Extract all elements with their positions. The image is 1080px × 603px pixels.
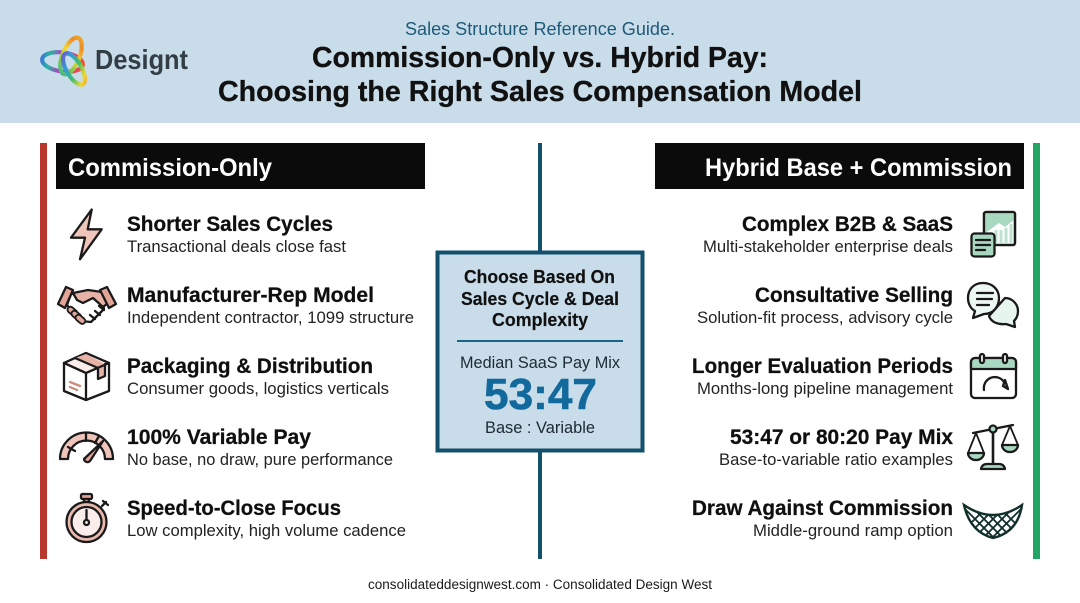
footer: consolidateddesignwest.com · Consolidated Design West [368,577,712,592]
item: pay mix scales: 53:47 or 80:20 Pay Mix [730,426,953,449]
item: manufacturer-rep model: Manufacturer-Rep Model [127,284,374,307]
icon: handshake [58,287,116,325]
pay mix caption: Base : Variable [485,418,595,437]
header kicker: Sales Structure Reference Guide. [405,19,675,39]
item: draw against commission [693,499,1024,540]
item: packaging & distribution: Packaging & Distribution [127,355,373,378]
item: complex b2b & saas [703,212,1015,256]
icon: speedometer gauge [60,432,113,462]
item: 100% variable pay [60,426,393,469]
item: pay mix scales [719,425,1018,469]
icon: balance scales [968,425,1018,469]
item: longer evaluation periods: Longer Evaluation Periods [692,355,953,378]
item: consultative selling: Consultative Selling [755,284,953,307]
item: complex b2b & saas: Complex B2B & SaaS [742,213,953,236]
callout heading: Choose Based On [464,267,615,287]
item: complex b2b & saas: Multi-stakeholder enterprise deals [703,238,953,256]
callout heading: Sales Cycle & Deal [461,289,619,309]
item: shorter sales cycles [71,210,346,259]
logo wordmark: Designt [95,44,188,75]
title: Commission-Only vs. Hybrid Pay: [312,42,768,74]
item: speed-to-close focus [66,494,406,542]
item: shorter sales cycles: Shorter Sales Cycles [127,213,333,236]
panel: commission-only [40,143,425,559]
item: 100% variable pay: No base, no draw, pure performance [127,451,393,469]
heading: commission-only: Commission-Only [68,154,272,182]
item: speed-to-close focus: Low complexity, high volume cadence [127,522,406,540]
icon: parcel box [64,353,109,400]
header band [0,0,1080,123]
title: Choosing the Right Sales Compensation Model [218,76,862,108]
heading: hybrid [655,143,1024,189]
item: manufacturer-rep model: Independent contractor, 1099 structure [127,309,414,327]
logo mark [41,35,89,88]
item: speed-to-close focus: Speed-to-Close Focus [127,497,341,520]
left accent bar [40,143,47,559]
pay mix figure: 53:47 [484,370,597,419]
item: draw against commission: Middle-ground ramp option [753,522,953,540]
item: 100% variable pay: 100% Variable Pay [127,426,311,449]
icon: stopwatch [66,494,108,542]
heading: commission-only [56,143,425,189]
item: manufacturer-rep model [58,284,414,327]
item: longer evaluation periods [692,354,1016,398]
panel: hybrid base + commission [655,143,1061,559]
icon: speech bubbles [968,283,1018,327]
item: consultative selling: Solution-fit process, advisory cycle [697,309,953,327]
item: packaging & distribution [64,353,389,400]
item: pay mix scales: Base-to-variable ratio examples [719,451,953,469]
heading: hybrid: Hybrid Base + Commission [705,154,1012,182]
logo [41,35,188,88]
panel: decision callout [438,252,642,450]
pay mix label: Median SaaS Pay Mix [460,353,620,372]
icon: safety net [962,502,1024,540]
centre divider line [538,143,542,559]
item: packaging & distribution: Consumer goods, logistics verticals [127,380,389,398]
icon: calendar [971,354,1016,398]
item: draw against commission: Draw Against Commission [692,497,953,520]
callout heading: Complexity [492,310,588,330]
item: consultative selling [697,283,1018,327]
title [218,42,862,108]
callout heading [461,267,619,330]
item: longer evaluation periods: Months-long pipeline management [697,380,953,398]
icon: chart and document [972,212,1015,256]
right accent bar [1033,143,1040,559]
item: shorter sales cycles: Transactional deals close fast [127,238,346,256]
icon: lightning bolt [71,210,102,259]
